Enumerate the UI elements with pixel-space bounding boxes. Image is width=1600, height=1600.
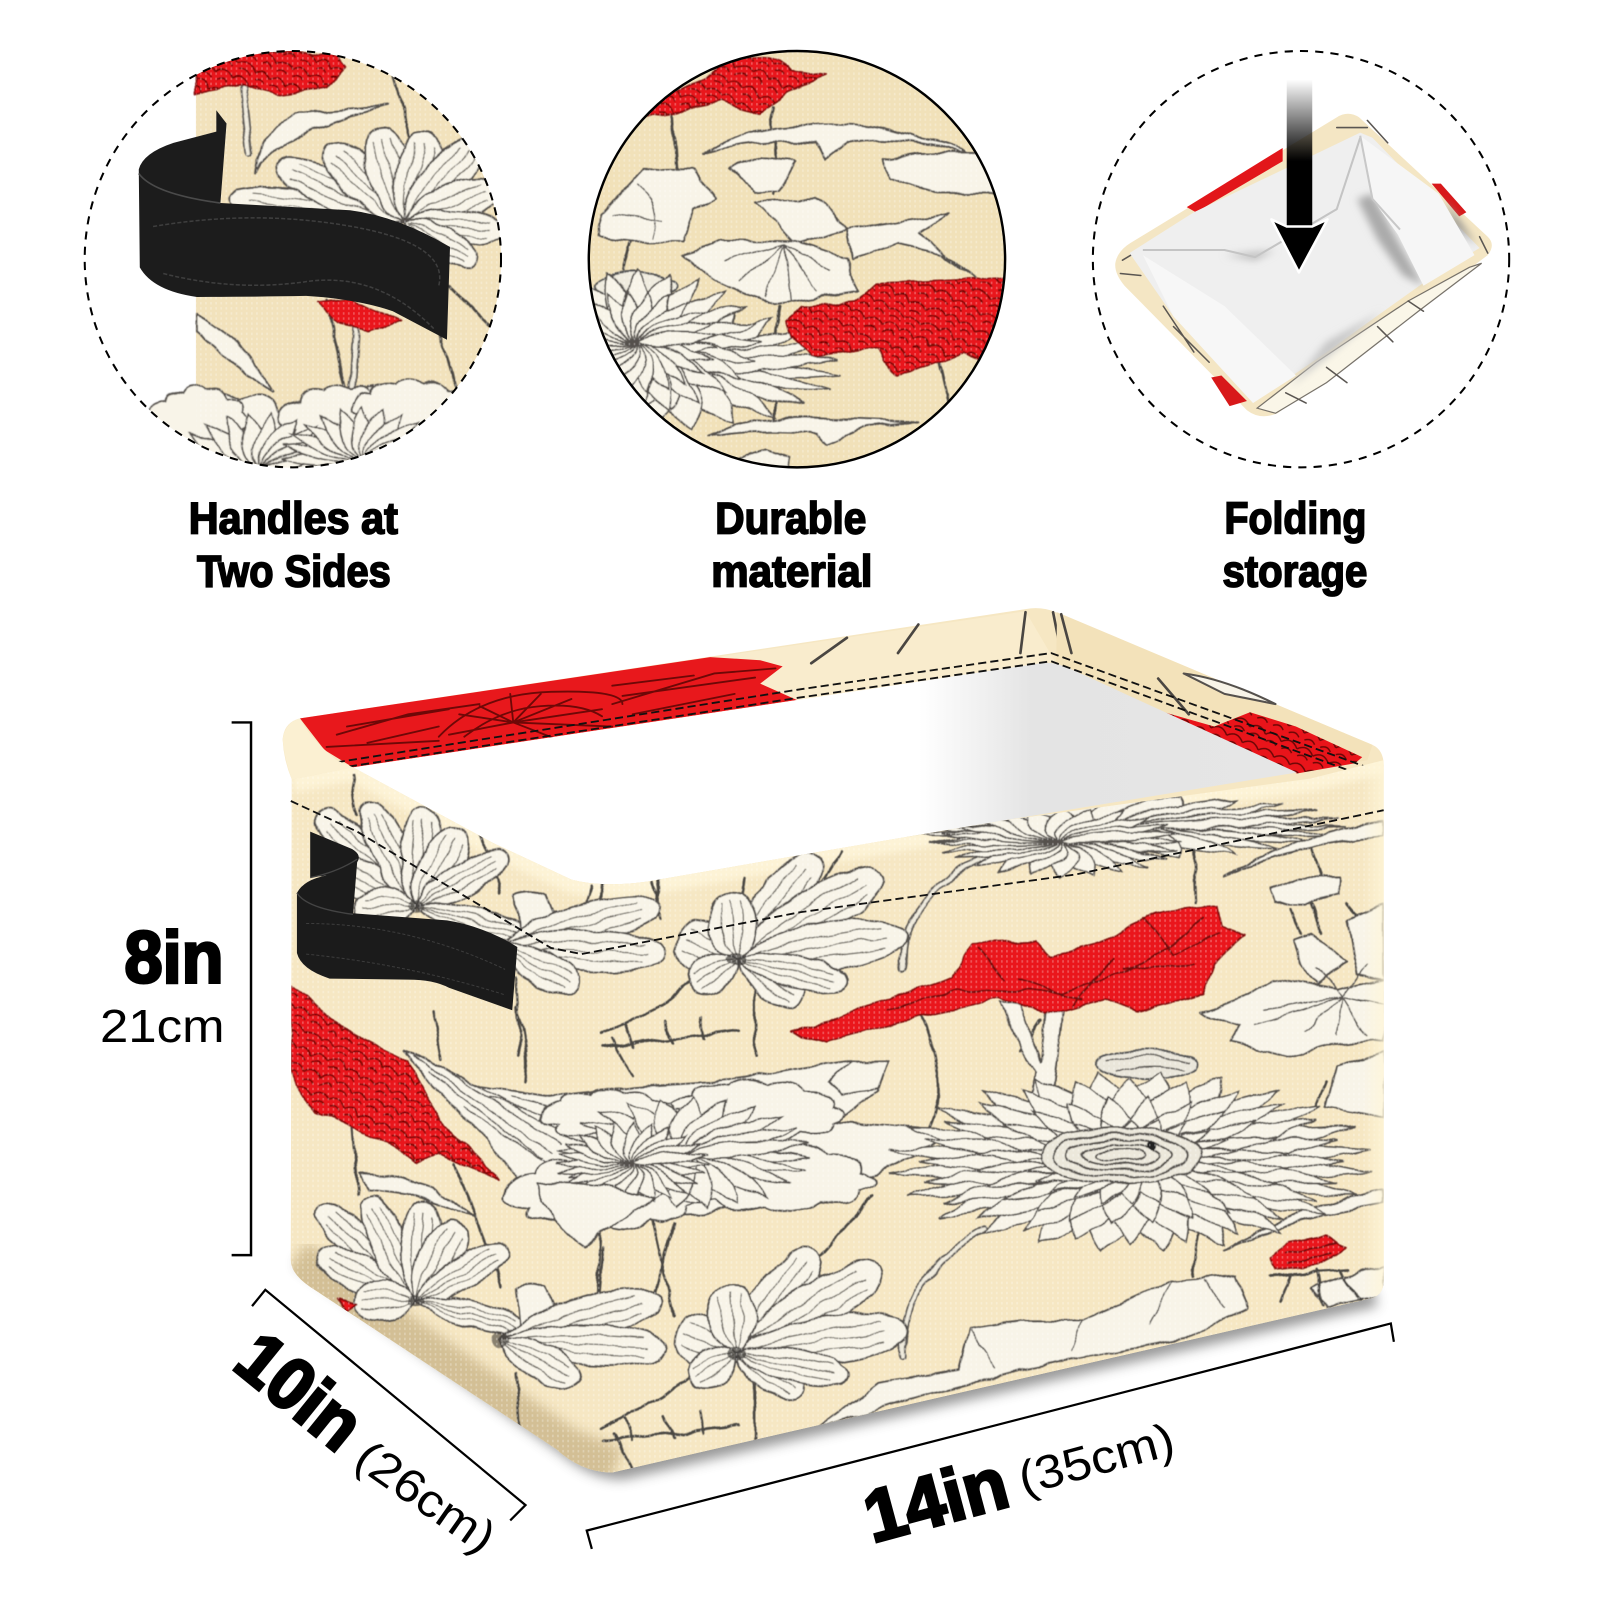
dashed circle outline (85, 51, 501, 467)
fabric stems (352, 776, 1327, 1316)
width dimension (587, 1323, 1394, 1558)
panel: durable material (588, 50, 1006, 588)
depth dimension (221, 1290, 526, 1563)
fabric close-up (590, 52, 1004, 466)
corner rim highlight (283, 718, 353, 780)
chrysanthemum (888, 1070, 1373, 1252)
basket front and side fabric (286, 755, 1401, 1480)
right wall with red flower (1056, 612, 1372, 773)
panel: folding storage (1093, 51, 1509, 597)
depth inches: 10in (221, 1315, 380, 1466)
width centimetres: (35cm) (1013, 1413, 1180, 1505)
label: folding storage: storage (1222, 546, 1367, 597)
label: folding storage (1222, 493, 1367, 597)
depth centimetres: (26cm) (346, 1430, 506, 1563)
panel: handles at two sides (85, 41, 512, 597)
buds and iris right (1291, 903, 1372, 934)
height bracket (232, 722, 251, 1255)
panel: basket with dimensions (100, 608, 1401, 1563)
width inches: 14in (855, 1441, 1017, 1558)
height inches: 8in (124, 916, 223, 999)
upper white band flower (898, 794, 1347, 877)
height dimension (100, 722, 251, 1255)
icon: side handle (297, 832, 517, 1010)
iris (847, 213, 978, 279)
label: handles at two sides: Two Sides (197, 546, 391, 597)
thin leaves (1224, 821, 1384, 876)
depth bracket (252, 1290, 526, 1520)
height centimetres: 21cm (100, 1000, 224, 1052)
label: handles at two sides: Handles at (189, 493, 398, 544)
label: handles at two sides (189, 493, 398, 597)
label: durable material: Durable (715, 493, 866, 544)
fabric close-up with handle (148, 51, 501, 468)
back wall with red flower (300, 611, 1061, 767)
white stem under red flower (1000, 1002, 1063, 1114)
label: durable material (711, 493, 872, 597)
basket silhouette (283, 608, 1384, 1472)
outer front stitching (291, 801, 1384, 954)
basket interior lining (353, 663, 1297, 884)
label: durable material: material (711, 546, 872, 597)
peony (404, 1050, 946, 1247)
inner rim stitching (337, 653, 1367, 773)
folded basket (1115, 114, 1492, 416)
red flowers on fabric (291, 985, 500, 1182)
label: folding storage: Folding (1224, 493, 1366, 544)
basket shadow (296, 1250, 1378, 1480)
dashed circle outline (1093, 51, 1509, 467)
lower white flower (816, 1276, 1247, 1429)
width bracket (587, 1323, 1394, 1549)
arrow pointing down (1271, 80, 1328, 272)
solid circle outline (589, 51, 1005, 467)
icon: black handle strap (139, 110, 450, 340)
